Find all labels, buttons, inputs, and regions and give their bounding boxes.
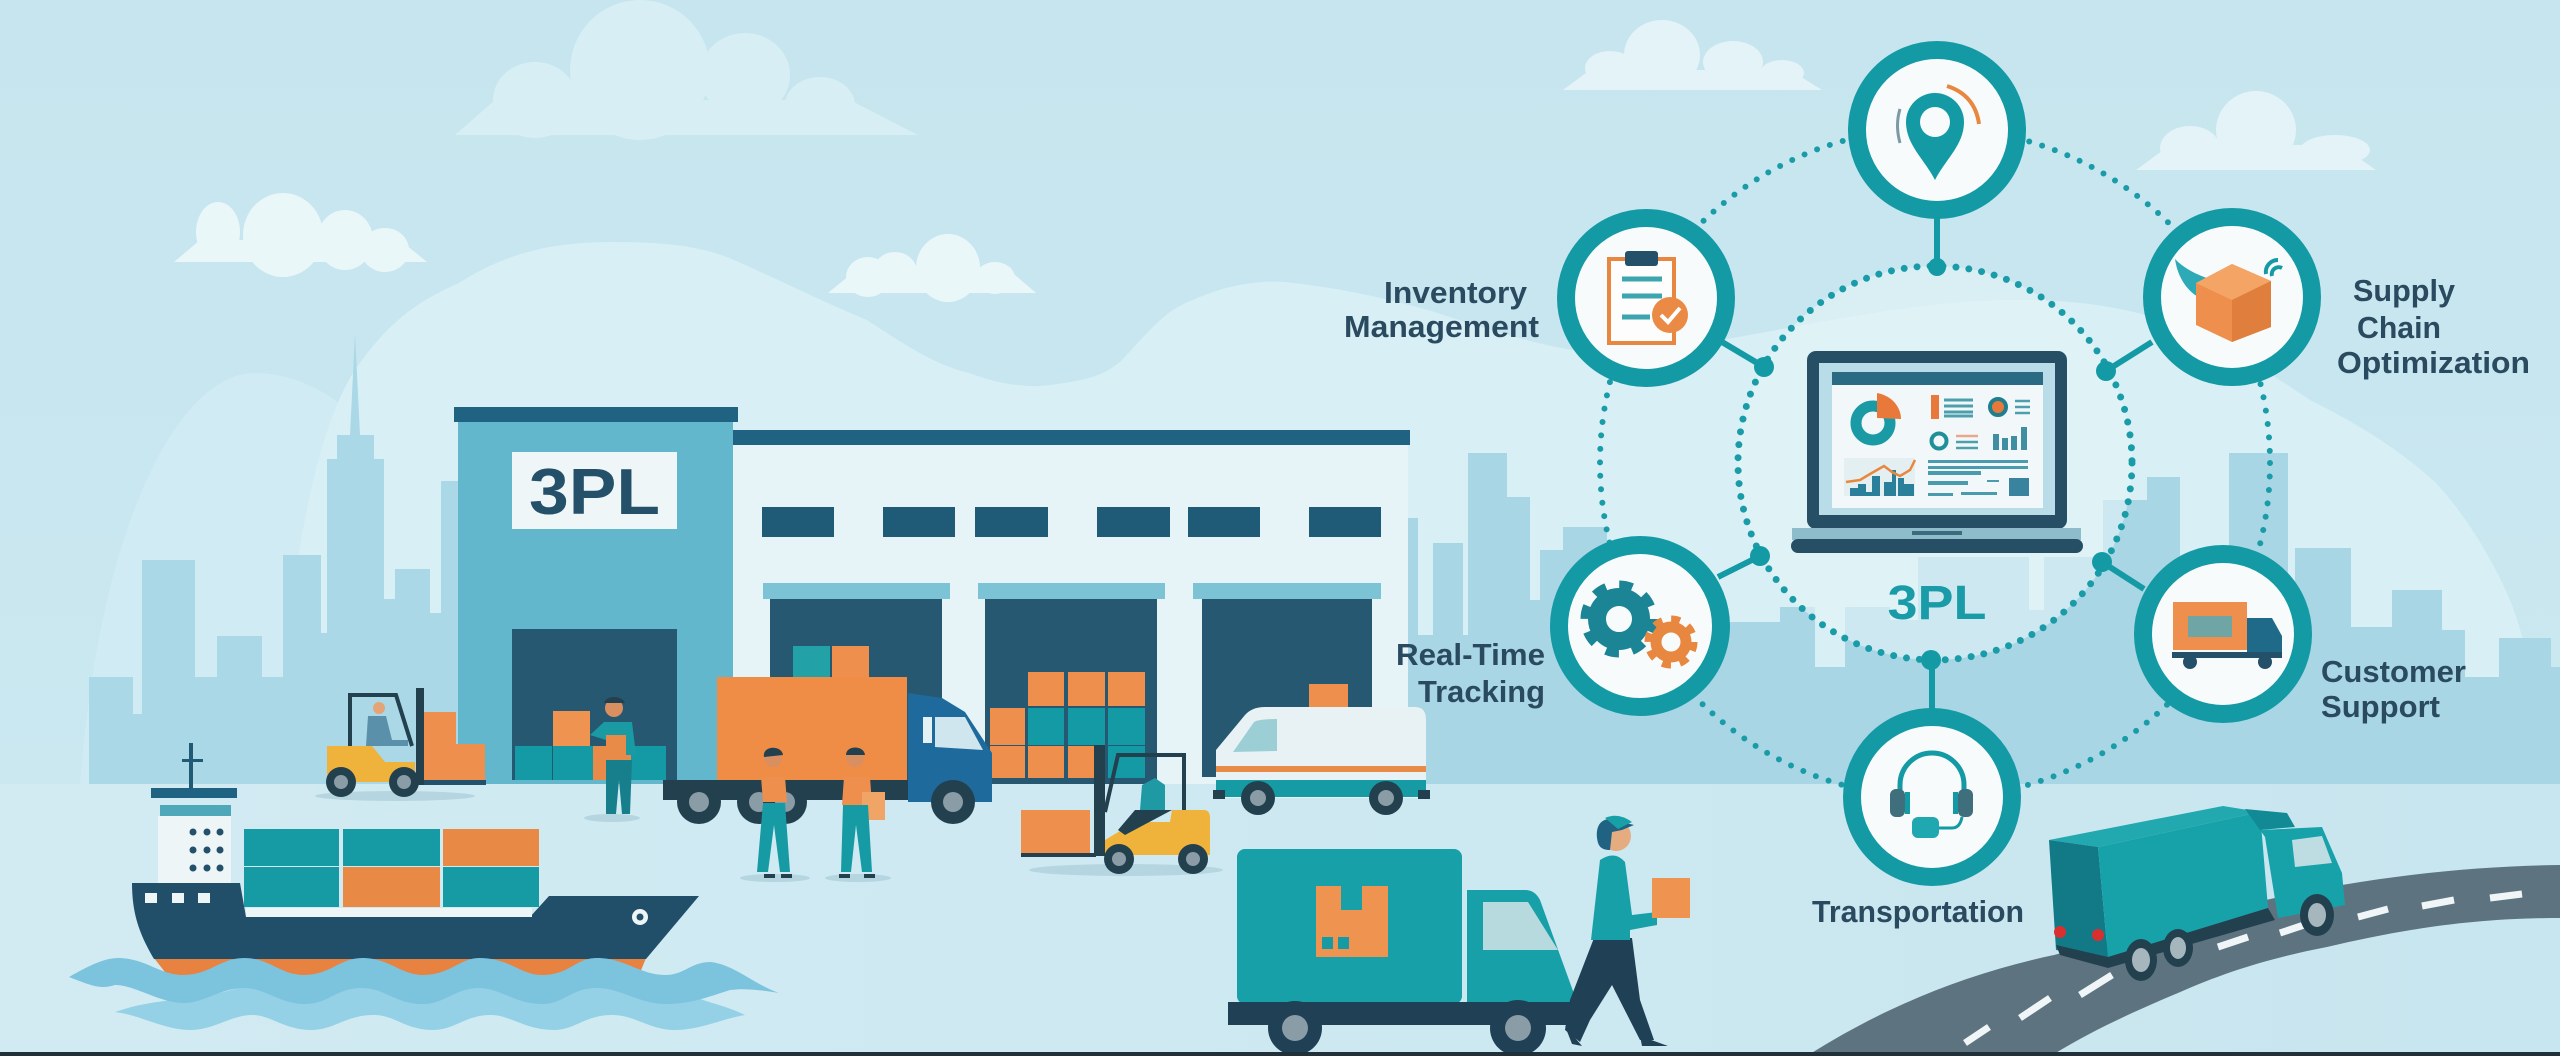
screen xyxy=(1819,363,2055,515)
skyline left xyxy=(89,334,470,784)
donut chart xyxy=(1856,393,1901,440)
node: transportation headset xyxy=(1852,717,2012,877)
screen header xyxy=(1832,372,2043,385)
inner dotted ring xyxy=(1738,266,2132,660)
box top xyxy=(2049,806,2260,847)
big pale cloud xyxy=(455,0,918,140)
cab xyxy=(908,693,992,802)
network diagram xyxy=(1344,50,2530,929)
torso xyxy=(1591,855,1657,940)
label: supply chain optimization: Chain xyxy=(2357,310,2441,345)
wing windows xyxy=(762,507,1381,537)
3PL sign xyxy=(512,452,677,529)
forklift left xyxy=(315,688,486,801)
label: supply chain optimization: Optimization xyxy=(2337,345,2530,380)
container ship xyxy=(69,743,779,1030)
mini widgets xyxy=(1931,395,2030,450)
inner disc xyxy=(1738,266,2132,660)
containers xyxy=(244,829,539,907)
label: supply chain optimization xyxy=(2337,273,2530,380)
chassis xyxy=(663,780,923,800)
head and cap xyxy=(1601,821,1631,851)
text lines xyxy=(1928,460,2029,496)
label: transportation: Transportation xyxy=(1812,894,2024,929)
skyline right xyxy=(1400,453,2560,784)
chassis xyxy=(1228,1002,1574,1025)
door 1 xyxy=(512,629,677,780)
bottom edge bar xyxy=(0,1052,2560,1056)
deck rail xyxy=(246,908,532,917)
truck orange xyxy=(663,646,992,824)
wing roof xyxy=(733,430,1410,445)
superstructure xyxy=(151,743,237,883)
connectors and nodes xyxy=(1718,215,2152,709)
label: customer support: Customer xyxy=(2321,654,2466,689)
label: supply chain optimization: Supply xyxy=(2353,273,2456,308)
delivery truck xyxy=(1228,849,1577,1056)
wheels xyxy=(677,780,721,824)
boxes on truck xyxy=(793,646,830,677)
laptop dashboard xyxy=(1791,351,2083,553)
parcel xyxy=(1652,878,1690,918)
middle cloud xyxy=(828,234,1036,302)
wheels xyxy=(2125,894,2334,981)
label: customer support xyxy=(2321,654,2466,724)
warehouse main block xyxy=(458,420,733,784)
ground xyxy=(0,784,2560,1054)
hull xyxy=(132,883,699,959)
node: customer support truck xyxy=(2143,554,2303,714)
box rear xyxy=(2049,840,2108,957)
label: inventory management: Inventory xyxy=(1384,275,1528,310)
label: real-time tracking xyxy=(1396,637,1545,709)
label: real-time tracking: Tracking xyxy=(1418,674,1545,709)
back wave xyxy=(115,985,745,1030)
cargo boxes at dock 2 xyxy=(990,672,1348,778)
label: real-time tracking: Real-Time xyxy=(1396,637,1545,672)
truck on road xyxy=(2049,806,2345,981)
box side xyxy=(2098,812,2268,957)
worker at door xyxy=(584,697,640,822)
main roof xyxy=(454,407,738,422)
left cloud xyxy=(174,193,427,277)
white van xyxy=(1213,707,1430,815)
3PL sign: 3PL xyxy=(529,455,660,528)
node: supply chain optimization xyxy=(2152,217,2312,377)
top right cloud xyxy=(1563,20,1822,90)
warehouse xyxy=(454,407,1410,784)
hull windows xyxy=(145,893,648,925)
road xyxy=(1810,865,2560,1054)
label: customer support: Support xyxy=(2321,689,2440,724)
far right cloud xyxy=(2136,91,2376,170)
deflector xyxy=(2245,809,2295,830)
laptop base xyxy=(1792,528,2081,540)
tail lights xyxy=(2054,926,2104,941)
area chart xyxy=(1844,458,1915,496)
wheels xyxy=(1268,1001,1322,1055)
cargo body xyxy=(717,677,907,780)
cargo boxes at door 1 xyxy=(515,711,666,780)
warehouse wing wall xyxy=(733,445,1408,784)
node: location xyxy=(1857,50,2017,210)
forklift right xyxy=(1021,745,1223,876)
cab window xyxy=(2292,836,2332,867)
feet xyxy=(1565,1026,1668,1046)
delivery worker xyxy=(1565,816,1690,1046)
clouds xyxy=(174,0,2376,302)
outer dotted ring xyxy=(1600,128,2270,798)
cargo box xyxy=(1237,849,1462,1004)
label: inventory management: Management xyxy=(1344,309,1539,344)
dock doors xyxy=(763,583,1381,784)
laptop lid xyxy=(1807,351,2067,529)
legs xyxy=(1565,938,1654,1042)
cab xyxy=(1467,890,1577,1002)
center label 3PL: 3PL xyxy=(1888,577,1986,630)
front wave xyxy=(69,958,779,1004)
label: inventory management xyxy=(1344,275,1539,344)
cab xyxy=(2260,827,2345,918)
background sky xyxy=(0,0,2560,800)
node: real-time tracking gears xyxy=(1559,545,1721,707)
two workers xyxy=(740,748,891,882)
chassis xyxy=(2056,908,2275,968)
hull bottom xyxy=(154,958,646,985)
node: inventory management xyxy=(1566,218,1726,378)
background hills xyxy=(80,242,2545,784)
package icon xyxy=(1316,886,1388,957)
